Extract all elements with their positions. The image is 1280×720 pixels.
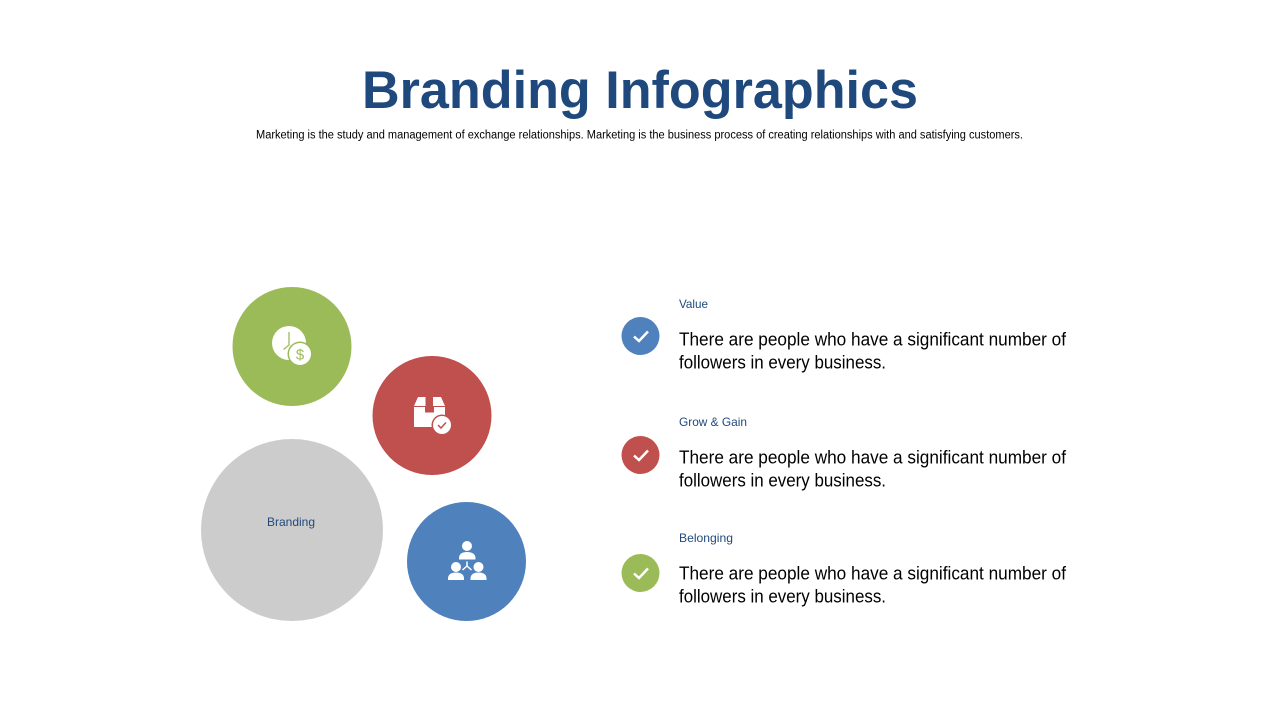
text block: followers in every business. — [679, 470, 886, 490]
title: Branding Infographics — [362, 61, 918, 120]
heading: Belonging: Belonging — [679, 531, 733, 545]
icon: clock and dollar: $ — [296, 346, 305, 364]
icon: people network — [448, 541, 486, 580]
list item: Grow & Gain — [622, 415, 1067, 490]
list item: Value — [622, 297, 1067, 372]
icon: green check — [622, 554, 660, 592]
subtitle: Marketing is the study and management of exchange relationships. Marketing is the business process of creating relationships with and satisfying customers. — [256, 130, 1023, 142]
icon: red check — [622, 436, 660, 474]
list item: Belonging — [622, 531, 1067, 606]
blue circle with people icon — [407, 502, 526, 621]
icon: blue check — [622, 317, 660, 355]
heading: Grow & Gain: Grow & Gain — [679, 415, 747, 429]
green circle with clock and dollar icon — [232, 287, 352, 406]
icon: box with check — [414, 397, 452, 436]
text block: There are people who have a significant number of — [679, 330, 1067, 350]
text block: followers in every business. — [679, 586, 886, 606]
text block: There are people who have a significant number of — [679, 448, 1067, 468]
red circle with box icon — [372, 356, 492, 475]
grey circle: Branding — [201, 439, 383, 621]
heading: Value: Value — [679, 297, 708, 311]
label: Branding: Branding — [267, 515, 315, 529]
text block: followers in every business. — [679, 352, 886, 372]
text block: There are people who have a significant number of — [679, 564, 1067, 584]
